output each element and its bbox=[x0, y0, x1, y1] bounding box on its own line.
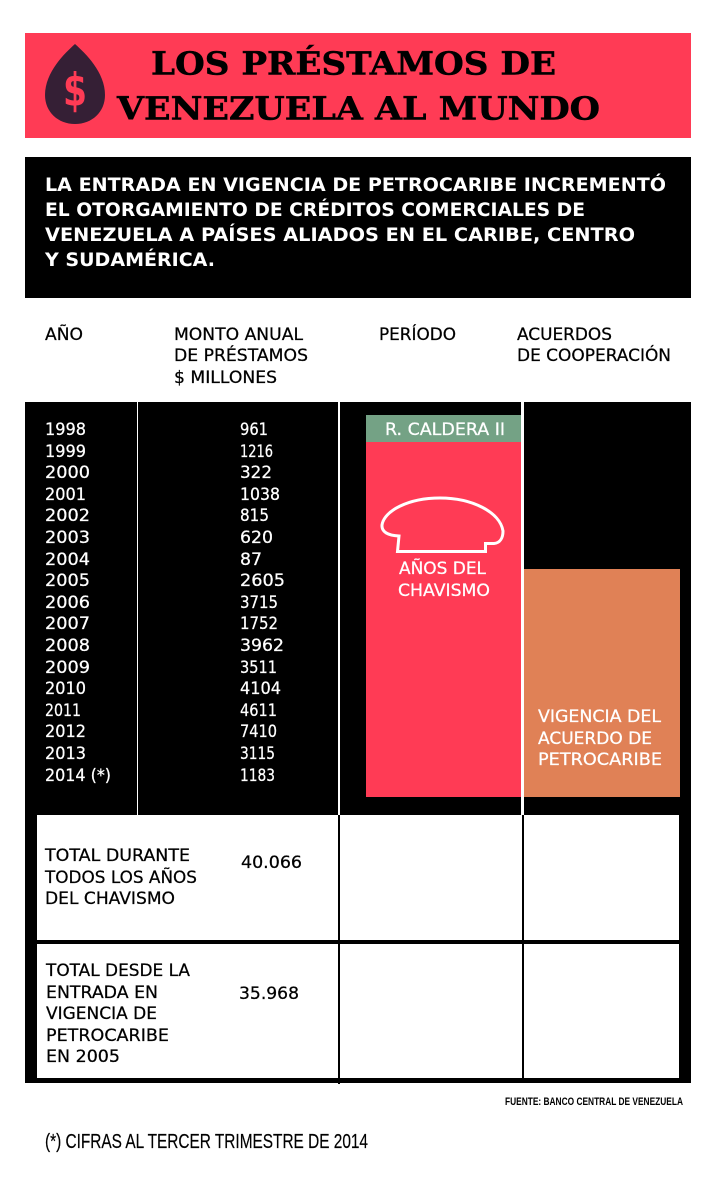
total row: Petrocaribe: ENTRADA EN bbox=[46, 983, 158, 1003]
amount column: 1183 bbox=[240, 766, 275, 786]
year column: 2008 bbox=[45, 636, 90, 656]
total row: Petrocaribe: TOTAL DESDE LA bbox=[45, 961, 190, 981]
amount column: 815 bbox=[240, 506, 269, 526]
intro panel bbox=[25, 157, 691, 298]
amount column: 620 bbox=[240, 528, 273, 548]
year column: 2010 bbox=[45, 679, 86, 699]
footnote: (*) CIFRAS AL TERCER TRIMESTRE DE 2014 bbox=[45, 1130, 368, 1153]
year column: 2014 (*) bbox=[45, 766, 111, 786]
column headers: AÑO bbox=[45, 323, 83, 345]
year column: 2009 bbox=[45, 658, 90, 678]
column headers: DE COOPERACIÓN bbox=[517, 344, 671, 366]
column headers: DE PRÉSTAMOS bbox=[174, 344, 308, 366]
label: años del chavismo: CHAVISMO bbox=[398, 581, 490, 601]
amount column: 961 bbox=[240, 420, 268, 440]
amount column: 7410 bbox=[240, 722, 277, 742]
amount column: 87 bbox=[240, 550, 262, 570]
year column: 2000 bbox=[45, 463, 90, 483]
amount column: 3511 bbox=[240, 658, 277, 678]
title: LOS PRÉSTAMOS DE bbox=[151, 44, 556, 82]
amount column: 3715 bbox=[240, 593, 278, 613]
agreement block: Petrocaribe bbox=[524, 569, 680, 797]
period block: Caldera II: R. CALDERA II bbox=[385, 420, 505, 440]
year column: 2006 bbox=[45, 593, 90, 613]
total row: chavismo: 40.066 bbox=[241, 853, 302, 873]
intro panel: EL OTORGAMIENTO DE CRÉDITOS COMERCIALES DE bbox=[45, 199, 585, 221]
agreement block: Petrocaribe: ACUERDO DE bbox=[538, 729, 652, 749]
amount column: 1038 bbox=[240, 485, 280, 505]
year column bbox=[45, 420, 111, 786]
title: VENEZUELA AL MUNDO bbox=[116, 90, 600, 128]
total row: Petrocaribe: VIGENCIA DE bbox=[46, 1004, 157, 1024]
title bbox=[116, 44, 600, 128]
year column: 2012 bbox=[45, 722, 86, 742]
total row: Petrocaribe: 35.968 bbox=[239, 984, 299, 1004]
agreement block: Petrocaribe: PETROCARIBE bbox=[538, 750, 662, 770]
year column: 2007 bbox=[45, 614, 90, 634]
total row: chavismo: TOTAL DURANTE bbox=[44, 846, 190, 866]
year column: 2001 bbox=[45, 485, 86, 505]
icon: oil drop with dollar sign bbox=[45, 44, 105, 124]
label: años del chavismo bbox=[398, 557, 490, 601]
year column: 2002 bbox=[45, 506, 90, 526]
period block: Caldera II bbox=[366, 415, 521, 442]
icon: oil drop with dollar sign: $ bbox=[63, 64, 87, 116]
year column: 2013 bbox=[45, 744, 86, 764]
label: años del chavismo: AÑOS DEL bbox=[399, 557, 487, 579]
intro panel: LA ENTRADA EN VIGENCIA DE PETROCARIBE INCREMENTÓ bbox=[45, 174, 666, 196]
column headers: MONTO ANUAL bbox=[174, 325, 304, 345]
year column: 2011 bbox=[45, 701, 81, 721]
amount column: 1752 bbox=[240, 614, 278, 634]
total row: chavismo: TODOS LOS AÑOS bbox=[44, 866, 197, 888]
year column: 2004 bbox=[45, 550, 90, 570]
amount column bbox=[240, 420, 285, 786]
total row: chavismo: DEL CHAVISMO bbox=[45, 889, 175, 909]
total row: Petrocaribe: EN 2005 bbox=[46, 1047, 120, 1067]
agreement block: Petrocaribe: VIGENCIA DEL bbox=[538, 707, 662, 727]
column headers: $ MILLONES bbox=[174, 368, 277, 388]
column headers bbox=[45, 323, 671, 388]
total row: Petrocaribe bbox=[37, 944, 679, 1078]
year column: 2005 bbox=[45, 571, 90, 591]
amount column: 4611 bbox=[240, 701, 277, 721]
table panel bbox=[25, 402, 691, 1084]
period block: años del chavismo bbox=[366, 442, 521, 797]
intro panel: Y SUDAMÉRICA. bbox=[44, 249, 215, 271]
amount column: 1216 bbox=[240, 442, 273, 462]
amount column: 2605 bbox=[240, 571, 285, 591]
amount column: 322 bbox=[240, 463, 272, 483]
icon: beret bbox=[382, 498, 503, 552]
column headers: PERÍODO bbox=[379, 323, 456, 345]
amount column: 3962 bbox=[240, 636, 284, 656]
amount column: 4104 bbox=[240, 679, 281, 699]
total row: chavismo bbox=[37, 815, 679, 940]
year column: 2003 bbox=[45, 528, 90, 548]
total row: Petrocaribe: PETROCARIBE bbox=[46, 1026, 169, 1046]
intro panel: VENEZUELA A PAÍSES ALIADOS EN EL CARIBE, CENTRO bbox=[45, 224, 635, 246]
title banner bbox=[25, 33, 691, 138]
year column: 1999 bbox=[45, 442, 86, 462]
year column: 1998 bbox=[45, 420, 86, 440]
column headers: ACUERDOS bbox=[517, 325, 612, 345]
amount column: 3115 bbox=[240, 744, 275, 764]
